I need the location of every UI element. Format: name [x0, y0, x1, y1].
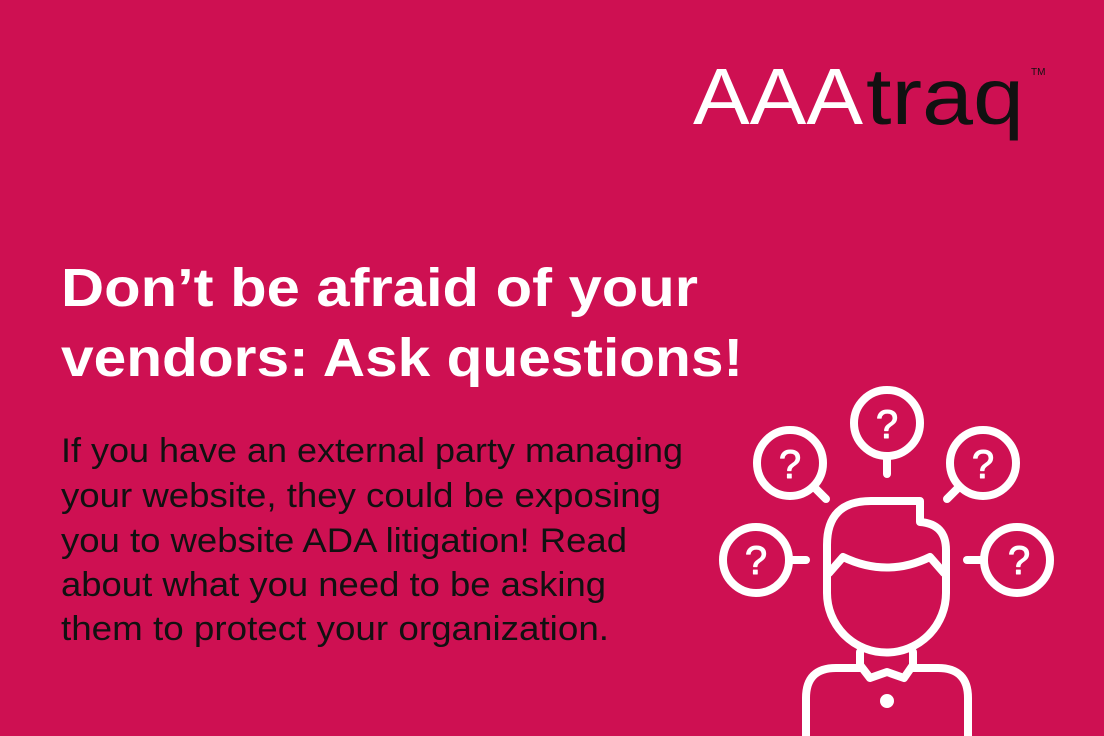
body text: If you have an external party managing — [61, 432, 683, 470]
bubble: top — [854, 390, 920, 474]
body — [806, 652, 968, 736]
logo: traq — [866, 52, 1024, 141]
bubble: right — [967, 527, 1050, 593]
icon: person with question bubbles — [723, 390, 1050, 736]
head — [827, 501, 946, 652]
logo: TM — [1031, 67, 1045, 78]
body text: your website, they could be exposing — [61, 477, 661, 515]
bubble: upper left — [757, 430, 826, 499]
title: vendors: Ask questions! — [61, 328, 743, 388]
bubble: upper right: ? — [972, 443, 994, 487]
bubble: left: ? — [745, 539, 767, 583]
bubble: upper left: ? — [779, 443, 801, 487]
body text: them to protect your organization. — [61, 610, 609, 648]
logo: AAA — [693, 52, 864, 141]
body text — [61, 432, 683, 648]
title: Don’t be afraid of your — [61, 258, 698, 318]
logo — [693, 52, 1045, 141]
bubble: upper right — [947, 430, 1016, 499]
bubble: top: ? — [876, 403, 898, 447]
bubble: left — [723, 527, 806, 593]
body text: you to website ADA litigation! Read — [61, 522, 627, 560]
title — [61, 258, 743, 388]
body text: about what you need to be asking — [61, 566, 606, 604]
bubble: right: ? — [1008, 539, 1030, 583]
